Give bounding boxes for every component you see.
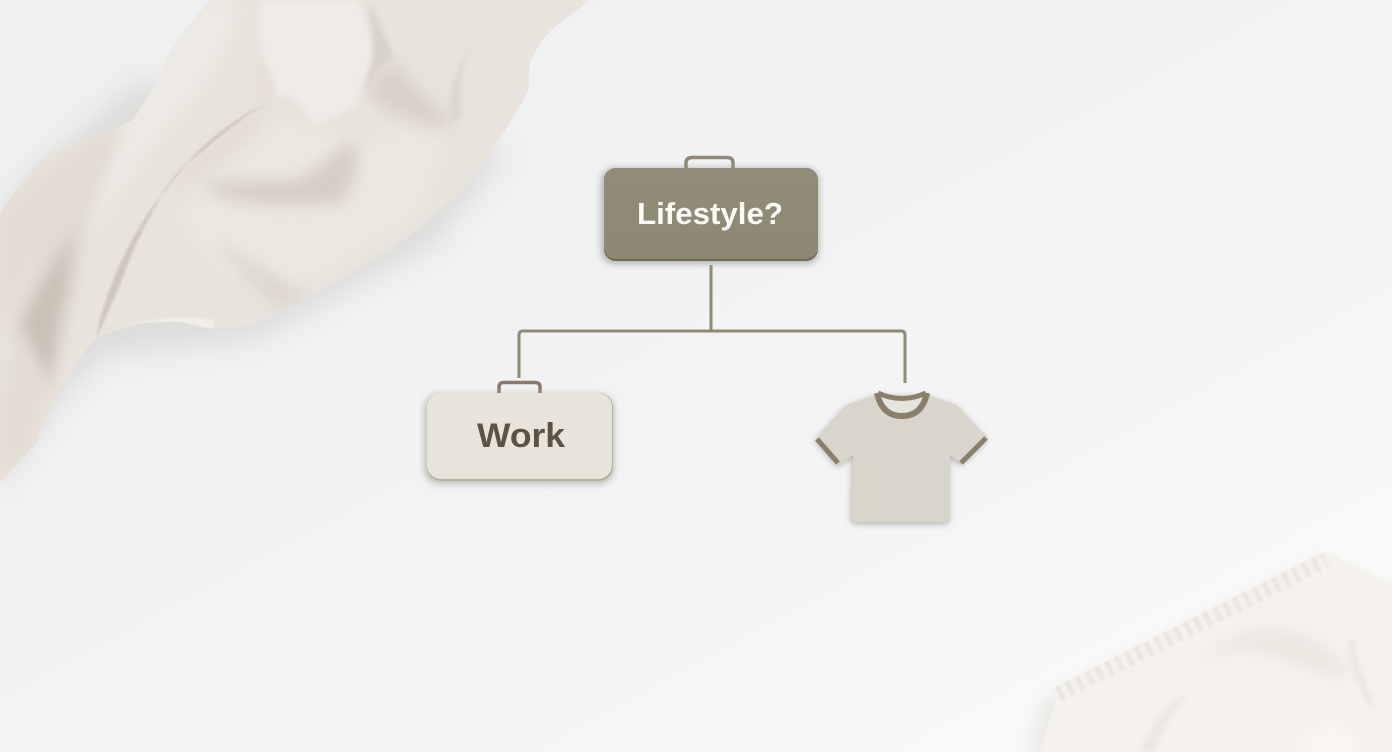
shadow: t-shirt	[815, 397, 987, 524]
back collar: t-shirt	[878, 393, 926, 398]
shadow: Work box	[424, 394, 614, 484]
face: Work box	[427, 393, 612, 479]
left cuff: t-shirt	[817, 439, 838, 463]
fabric: draped cloth top left	[0, 0, 589, 496]
connector lines	[519, 265, 905, 383]
shadow: Lifestyle box	[601, 168, 819, 264]
label: Lifestyle?: Lifestyle?	[637, 196, 783, 231]
collar opening: t-shirt	[881, 394, 923, 416]
box: Work	[424, 382, 614, 484]
right cuff: t-shirt	[961, 438, 986, 463]
body: Lifestyle box	[604, 168, 818, 261]
box: Lifestyle?	[601, 158, 819, 264]
fabric: knit cloth bottom right	[1029, 552, 1392, 752]
handle: Work box	[499, 382, 540, 393]
handle: Lifestyle box	[686, 158, 733, 168]
body: t-shirt	[816, 395, 988, 522]
label: Work: Work	[477, 417, 565, 455]
icon: t-shirt	[815, 393, 988, 524]
body: Work box	[427, 393, 613, 481]
collar: t-shirt	[877, 393, 927, 416]
face: Lifestyle box	[604, 168, 818, 259]
